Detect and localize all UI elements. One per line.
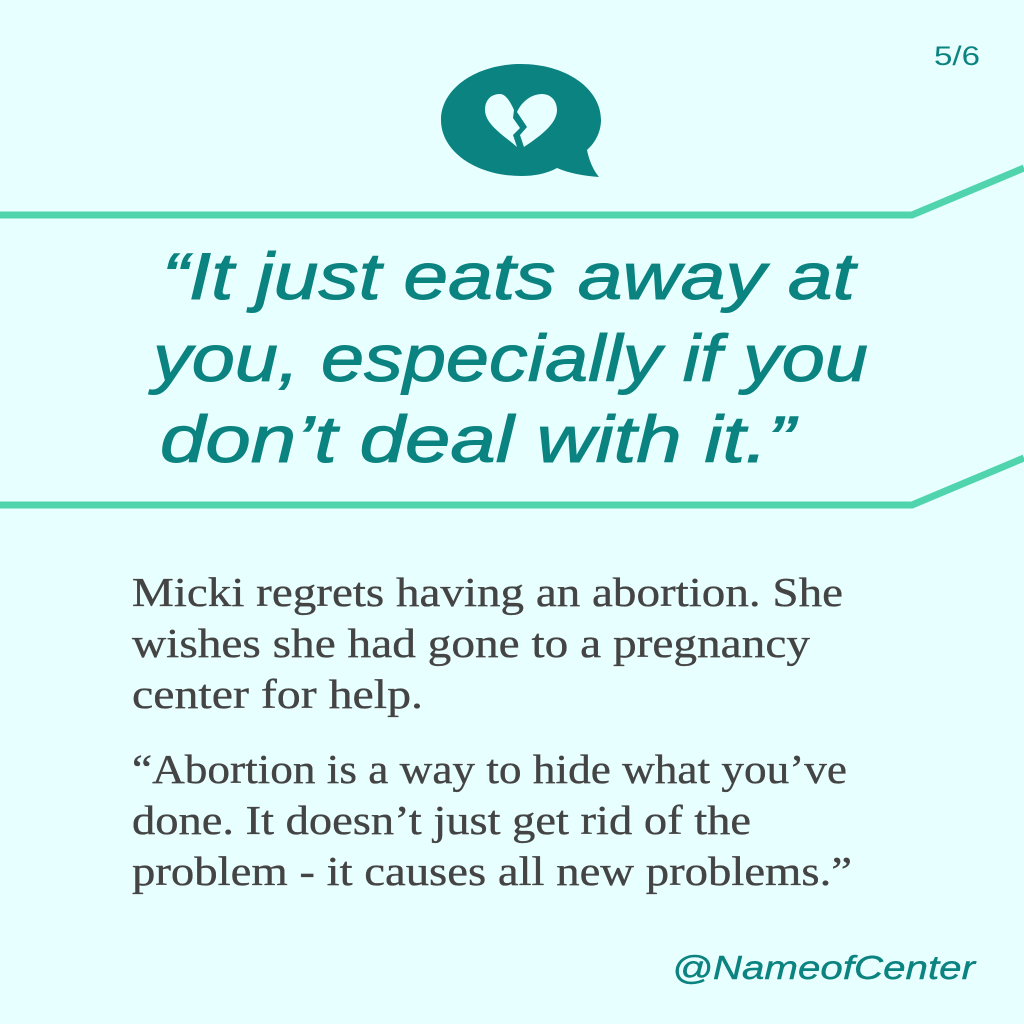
body text: second paragraph — [132, 746, 852, 894]
quote heading: don’t deal with it.” — [160, 402, 799, 476]
quote heading: “It just eats away at — [162, 239, 858, 313]
bottom divider line — [0, 458, 1024, 505]
top divider line — [0, 168, 1024, 215]
icon: speech bubble with broken heart — [441, 64, 601, 177]
quote heading — [148, 239, 868, 476]
body text: second paragraph: problem - it causes all new problems.” — [132, 848, 852, 894]
body text: first paragraph: Micki regrets having an abortion. She — [132, 569, 843, 615]
body text: first paragraph: wishes she had gone to a pregnancy — [132, 620, 811, 666]
social handle: @NameofCenter — [672, 949, 977, 986]
body text: second paragraph: done. It doesn’t just get rid of the — [132, 797, 751, 843]
body text: second paragraph: “Abortion is a way to hide what you’ve — [132, 746, 847, 792]
quote heading: you, especially if you — [148, 321, 868, 395]
body text: first paragraph — [132, 569, 843, 717]
page number: 5/6 — [934, 41, 980, 71]
body text: first paragraph: center for help. — [132, 671, 423, 717]
